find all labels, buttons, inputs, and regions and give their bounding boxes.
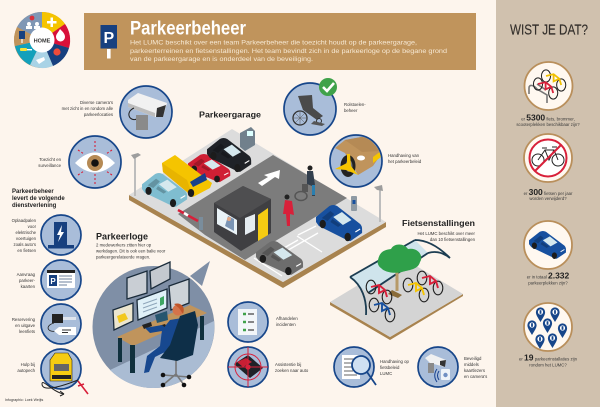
icon: parking card circle: P xyxy=(50,277,56,286)
label: autopech: Hulp bij xyxy=(21,362,35,367)
label: parkeerkaarten xyxy=(17,272,36,289)
text: fietsenstallingen: Het LUMC beschikt over meer xyxy=(417,231,476,236)
fact 3 text xyxy=(527,270,570,286)
label: incidenten: incidenten xyxy=(276,322,296,327)
label: handhaving: Handhaving van xyxy=(388,153,420,158)
label: rolstoelen xyxy=(344,102,366,113)
fact 4: parking pins xyxy=(524,303,572,351)
intro text xyxy=(130,40,447,63)
label: beveiligd: Beveiligd xyxy=(464,356,482,361)
heading: dienstverlening xyxy=(12,189,65,209)
illustration: bike shelter xyxy=(330,240,463,340)
illustration: monitoring room bubble xyxy=(92,261,214,388)
label: oplaadpalen xyxy=(12,218,37,253)
icon: security camera circle xyxy=(120,86,172,138)
heading: parkeerloge: Parkeerloge xyxy=(96,232,148,242)
heading: dienstverlening: Parkeerbeheer xyxy=(12,189,54,195)
icon: car locator circle xyxy=(228,347,268,387)
label: autopech xyxy=(17,362,36,373)
label: camera's: met zicht in en rondom alle xyxy=(62,106,114,111)
label: beveiligd xyxy=(464,356,487,379)
icon: wheelchair circle xyxy=(284,83,336,135)
label: assistentie: zoeken naar auto xyxy=(275,368,309,373)
icon: checklist circle xyxy=(228,302,268,342)
yellow van xyxy=(162,155,212,197)
text: parkeerloge xyxy=(96,242,166,260)
label: oplaadpalen: voertuigen xyxy=(16,236,37,241)
label: assistentie xyxy=(275,362,309,373)
fact 1 text xyxy=(516,112,580,127)
barrier xyxy=(178,210,198,221)
label: toezicht xyxy=(38,157,62,168)
heading: fietsenstallingen: Fietsenstallingen xyxy=(402,218,475,228)
label: assistentie: Assistentie bij xyxy=(275,362,301,367)
operator and chair xyxy=(163,360,189,385)
label: camera's: Diverse camera's xyxy=(80,100,113,105)
icon: parking sign: P xyxy=(103,30,114,47)
home navigation wheel xyxy=(14,12,70,68)
wall monitors xyxy=(113,262,189,330)
charger xyxy=(351,196,357,211)
label: parkeerkaarten: Aanvraag xyxy=(17,272,36,277)
label: leenfiets: Reservering xyxy=(12,317,36,322)
icon: wheel clamp circle xyxy=(330,135,382,187)
fact 1 text: er 5300 fiets, brommer, xyxy=(521,112,575,122)
desk xyxy=(117,305,207,346)
arrow xyxy=(258,170,280,186)
label: handhaving: het parkeerbeleid xyxy=(388,159,422,164)
icon: green check xyxy=(319,78,337,96)
label: handhaving fietsbeleid: LUMC xyxy=(380,371,392,376)
pedestrian xyxy=(283,200,294,226)
label: beveiligd: kaartlezers xyxy=(464,368,485,373)
heading: dienstverlening: levert de volgende xyxy=(12,196,65,202)
person with wheelchair xyxy=(308,166,312,170)
parked cars xyxy=(142,173,187,207)
heading: parkeergarage: Parkeergarage xyxy=(199,110,261,120)
panel: wist je dat sidebar xyxy=(496,0,600,407)
text: parkeerloge: 2 medewerkers zitten hier op xyxy=(96,242,152,248)
fact 3 text: er in totaal 2.332 xyxy=(527,270,570,280)
intro text: parkeerterreinen en fietsenstallingen. Het team bevindt zich in de parkeerloge op de begane grond xyxy=(130,48,447,55)
icon: parking card circle xyxy=(41,260,81,300)
icon: charging post circle xyxy=(41,215,81,255)
label: oplaadpalen: Oplaadpalen xyxy=(12,218,37,223)
label: handhaving fietsbeleid xyxy=(380,359,410,376)
text: fietsenstallingen: dan 10 fietsenstallingen xyxy=(430,237,476,242)
label: handhaving fietsbeleid: fietsbeleid xyxy=(380,365,400,370)
icon: surveillance eye circle xyxy=(69,136,121,188)
label: oplaadpalen: elektrische xyxy=(15,230,37,235)
fact 4 text xyxy=(519,352,578,368)
pay machine xyxy=(240,127,255,151)
title: Parkeerbeheer xyxy=(130,18,246,40)
icon: parking sign xyxy=(100,25,117,58)
label: toezicht: surveillance xyxy=(38,163,62,168)
label: parkeerkaarten: parkeer- xyxy=(19,278,36,283)
label: autopech: autopech xyxy=(17,368,36,373)
heading: dienstverlening: dienstverlening xyxy=(12,203,57,209)
label: oplaadpalen: en fietsen xyxy=(17,248,37,253)
credit: Infographic: Loek Weijts xyxy=(5,398,43,402)
label: parkeerkaarten: kaarten xyxy=(21,284,36,289)
illustration: parking garage platform xyxy=(129,127,386,288)
label: incidenten xyxy=(276,316,298,327)
intro text: Het LUMC beschikt over een team Parkeerbeheer die toezicht houdt op de parkeergarage, xyxy=(130,40,417,46)
lamp posts xyxy=(135,157,380,222)
fact 3: blue car xyxy=(524,221,572,269)
label: rolstoelen: beheer xyxy=(344,108,358,113)
home navigation wheel: HOME xyxy=(34,38,51,44)
label: oplaadpalen: zoals auto's xyxy=(13,242,36,247)
label: leenfiets xyxy=(12,317,36,334)
fact 2 text: er 300 fietsen per jaar xyxy=(524,187,573,197)
fact 3 text: parkeerplekken zijn? xyxy=(528,280,568,286)
text: parkeerloge: parkeergerelateerde vragen. xyxy=(96,254,150,260)
intro text: van de parkeergarage en is onderdeel van de beveiliging. xyxy=(130,56,313,63)
fact 4 text: er 19 parkeerinstallaties zijn xyxy=(519,352,578,362)
label: beveiligd: en camera's xyxy=(464,374,487,379)
label: handhaving xyxy=(388,153,422,164)
header banner xyxy=(84,13,476,70)
label: leenfiets: en uitgave xyxy=(15,323,36,328)
label: camera's xyxy=(62,100,114,117)
booth xyxy=(214,186,271,251)
label: beveiligd: middels xyxy=(464,362,479,367)
label: leenfiets: leenfiets xyxy=(19,329,35,334)
icon: key tag circle xyxy=(41,304,81,344)
label: oplaadpalen: voor xyxy=(28,224,37,229)
label: incidenten: Afhandelen xyxy=(276,316,298,321)
icon: secured by camera circle xyxy=(418,347,458,387)
fact 2 text: worden verwijderd? xyxy=(529,196,567,201)
fact 2: no bikes xyxy=(524,134,572,182)
label: toezicht: Toezicht en xyxy=(39,157,62,162)
label: camera's: parkeerlocaties xyxy=(84,112,113,117)
text: parkeerloge: werkdagen. Dit is ook een balie voor xyxy=(96,248,166,254)
icon: magnifier circle xyxy=(334,347,376,387)
label: rolstoelen: Rolstoelen- xyxy=(344,102,366,107)
fact 1 text: scooterplekken beschikbaar zijn? xyxy=(516,122,580,127)
icon: jump starter circle xyxy=(41,349,88,396)
text: fietsenstallingen xyxy=(417,231,476,242)
fact 4 text: rondom het LUMC? xyxy=(529,362,567,368)
fact 1: bike rack xyxy=(524,62,572,110)
label: handhaving fietsbeleid: Handhaving op xyxy=(380,359,410,364)
